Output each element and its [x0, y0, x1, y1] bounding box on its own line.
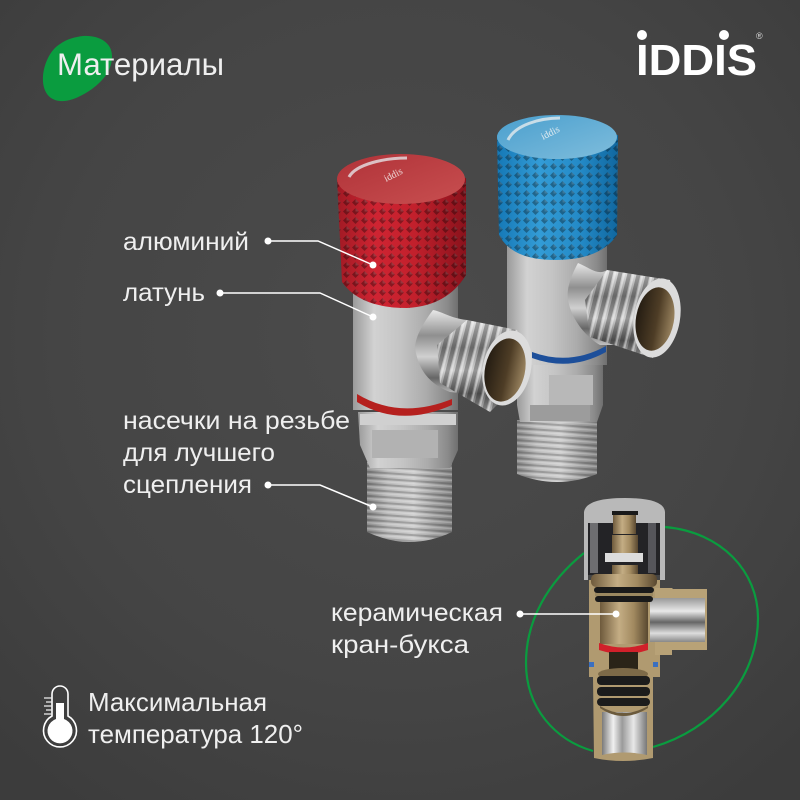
red valve ring	[357, 394, 452, 416]
logo: iDDiS: IDDIS	[636, 36, 757, 85]
cutaway red band	[599, 643, 648, 654]
red valve knurled knob	[337, 178, 466, 308]
icon: thermometer	[43, 686, 76, 747]
label: насечки на резьбе: сцепления	[123, 471, 252, 499]
leader line: алюминий	[264, 238, 376, 268]
blue valve side outlet	[568, 263, 687, 361]
green circle around cutaway	[526, 527, 758, 751]
heading: Материалы: Материалы	[57, 46, 224, 82]
red valve threaded base	[367, 462, 452, 542]
blue valve ring	[532, 346, 606, 364]
red valve	[337, 154, 538, 542]
red valve: iddis	[382, 166, 405, 185]
blue valve body	[507, 235, 607, 365]
leader line: насечки	[264, 482, 376, 510]
blue valve threaded base	[517, 420, 597, 482]
blue valve knurled knob	[497, 135, 618, 260]
green blob	[43, 36, 112, 101]
red valve body	[353, 285, 458, 410]
blue valve hex nut	[517, 363, 603, 422]
red valve hex nut	[358, 412, 458, 468]
cutaway lower chrome tube	[602, 712, 647, 755]
cutaway cap	[584, 498, 665, 580]
cutaway valve	[584, 498, 707, 761]
label: латунь: латунь	[123, 279, 205, 307]
label: латунь	[123, 279, 376, 320]
cutaway plunger rings	[597, 668, 650, 716]
label: керамическая кран-букса	[331, 599, 620, 659]
heading: Материалы	[43, 36, 224, 101]
cutaway spindle	[605, 515, 643, 578]
label: насечки на резьбе: насечки на резьбе	[123, 407, 350, 435]
cutaway disk and O-rings	[591, 574, 657, 602]
label: керамическая кран-букса: кран-букса	[331, 631, 469, 659]
label: алюминий: алюминий	[123, 228, 249, 256]
text: максимальная температура: температура 120°	[88, 719, 303, 749]
leader line: кран-букса	[516, 610, 620, 618]
blue valve: iddis	[539, 124, 562, 143]
blue valve knob top	[497, 115, 617, 159]
label: насечки на резьбе	[123, 407, 376, 510]
logo: iDDiS: ®	[756, 31, 763, 41]
label: алюминий	[123, 228, 376, 268]
red valve side outlet	[415, 310, 538, 412]
cutaway side outlet	[655, 588, 707, 655]
red valve knob top	[337, 154, 465, 204]
cutaway lower body	[589, 580, 660, 761]
cutaway ceramic cartridge	[600, 602, 648, 644]
label: насечки на резьбе: для лучшего	[123, 439, 275, 467]
cutaway cage	[609, 652, 638, 674]
blue valve	[497, 115, 687, 482]
text: максимальная температура: Максимальная	[88, 687, 267, 717]
leader line: латунь	[216, 290, 376, 320]
label: керамическая кран-букса: керамическая	[331, 599, 503, 627]
text: максимальная температура	[88, 687, 303, 749]
